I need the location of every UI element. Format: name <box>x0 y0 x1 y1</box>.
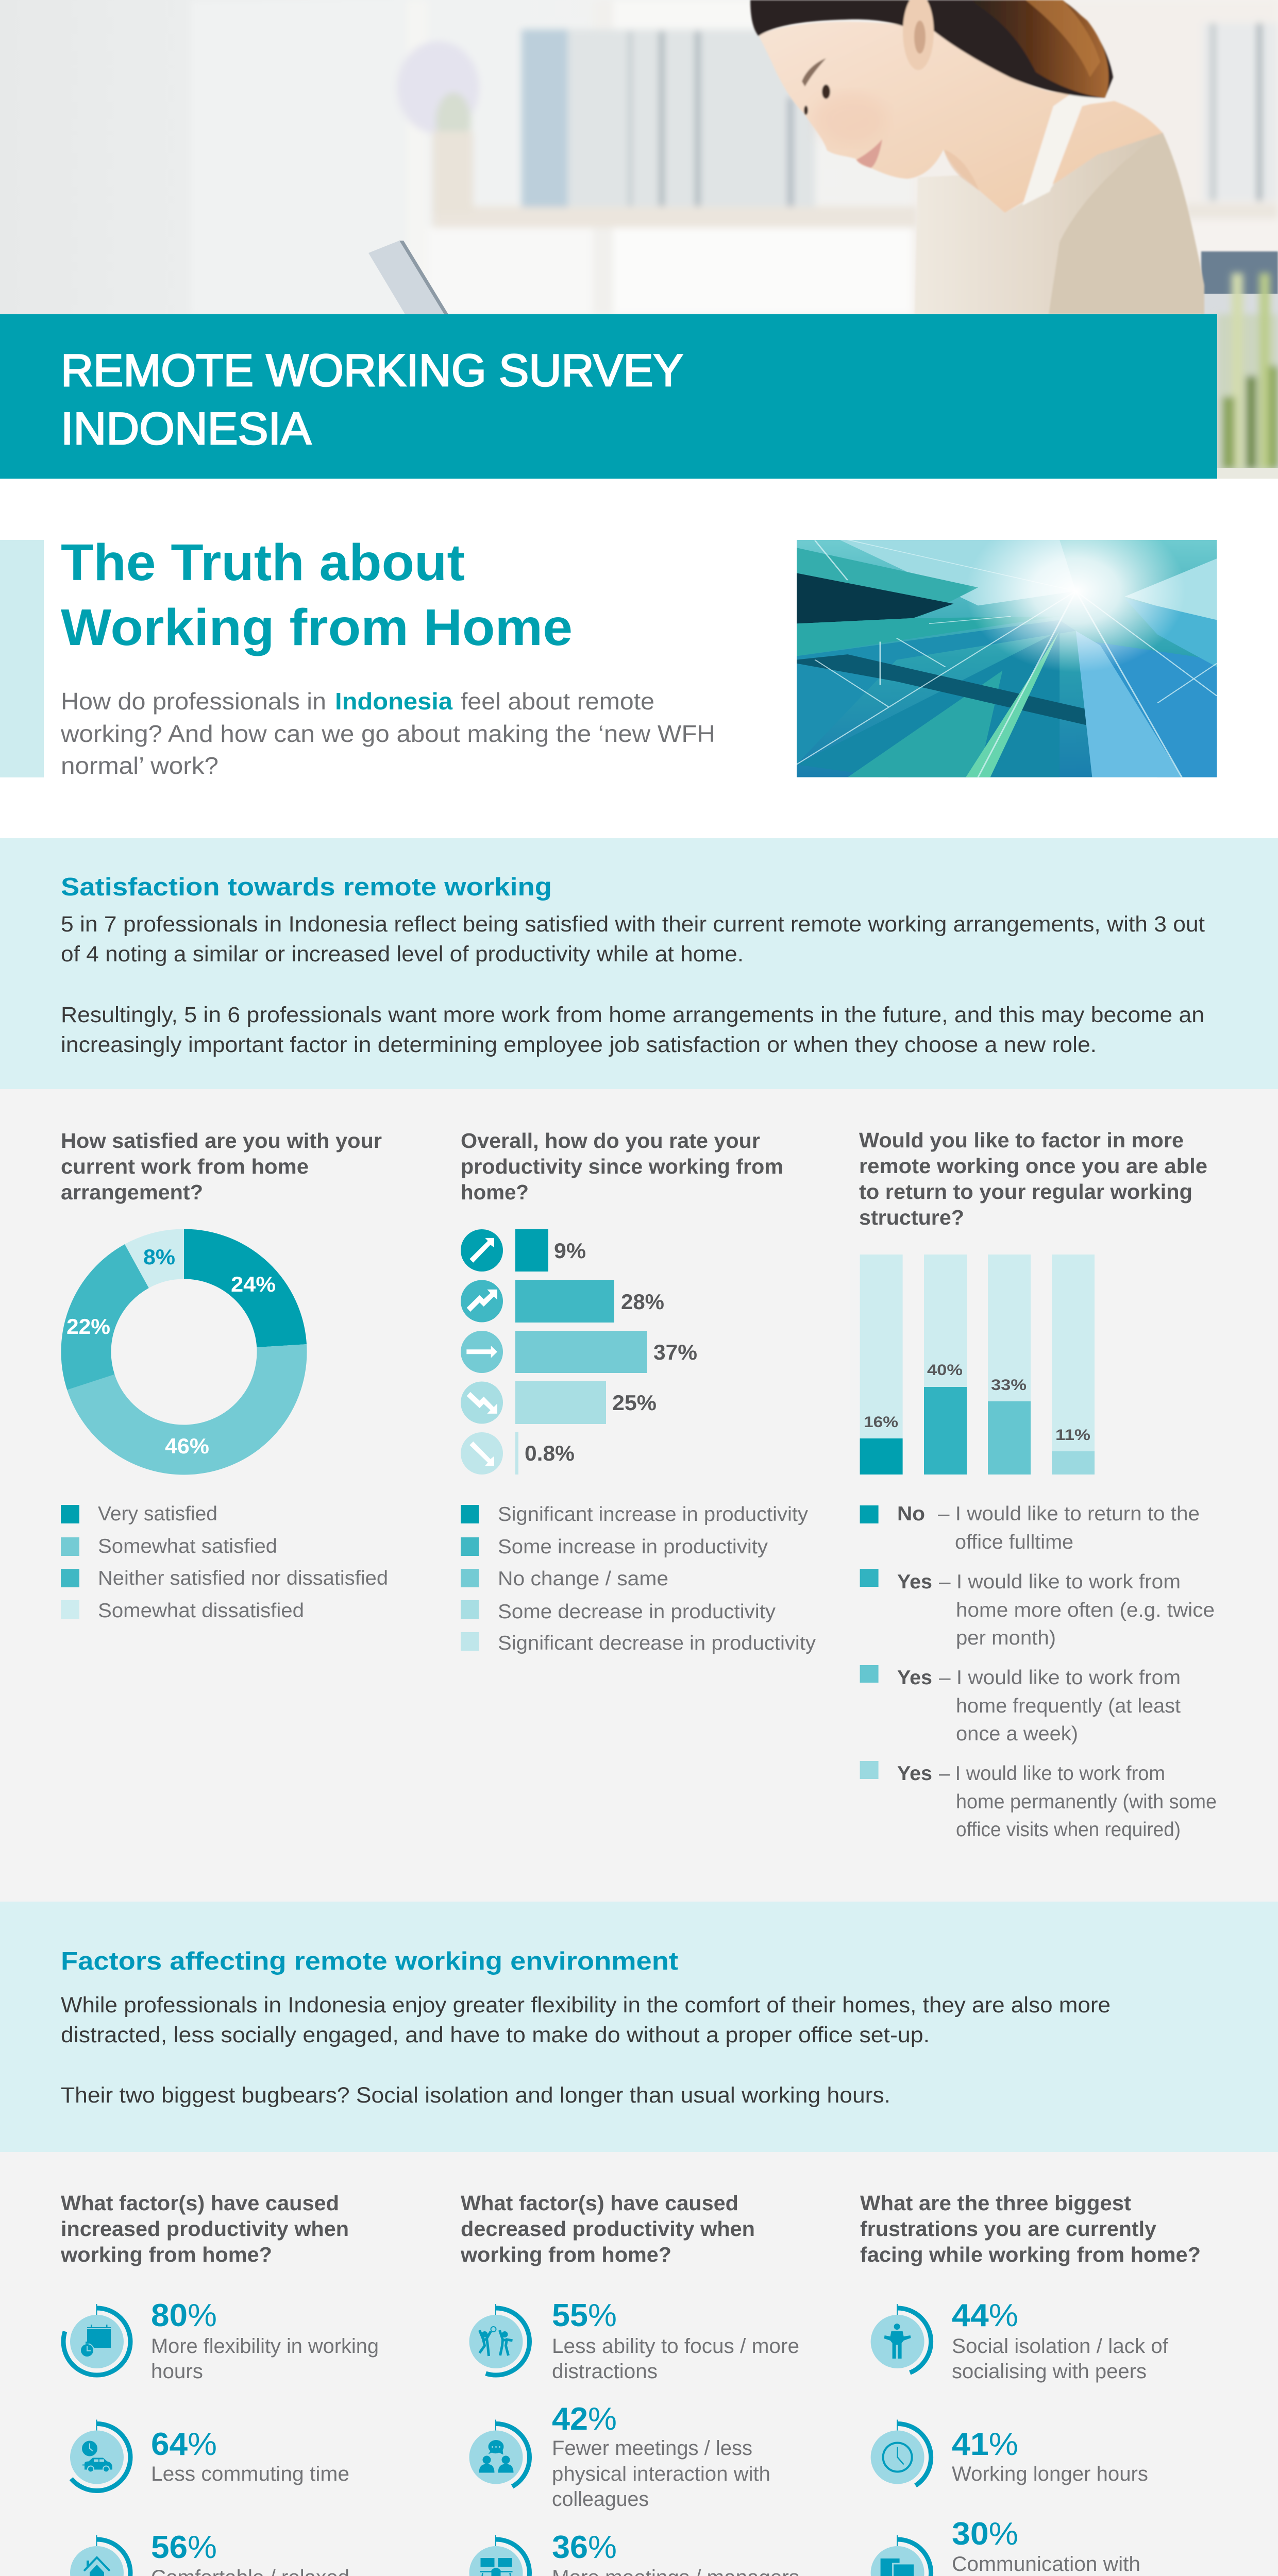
item: 55% distractions: distractions <box>552 2360 658 2383</box>
item: 80% flexibility <box>63 2298 379 2383</box>
icon: two people talking <box>463 2419 530 2490</box>
column legend: home more often (e.g. twice <box>956 1599 1215 1621</box>
icon: children playing <box>463 2304 530 2375</box>
section text <box>61 1993 1111 2108</box>
item: 64% commuting: Less commuting time <box>151 2463 349 2485</box>
question: Would you like to factor in more <box>859 1128 1184 1152</box>
donut chart: 24% <box>231 1272 276 1296</box>
main title: Working from Home <box>61 599 573 656</box>
column chart: 40% <box>927 1362 963 1379</box>
donut legend: Very satisfied <box>98 1503 217 1525</box>
item: 80% flexibility: hours <box>151 2360 203 2383</box>
item: 44% isolation: 44% <box>952 2298 1018 2333</box>
bar legend: Some increase in productivity <box>498 1536 768 1558</box>
column legend: Yes <box>897 1571 932 1593</box>
question: productivity since working from <box>461 1155 783 1178</box>
question <box>860 2191 1201 2266</box>
column legend: Yes <box>897 1762 932 1785</box>
column legend: – I would like to work from <box>939 1762 1165 1785</box>
main title <box>61 534 573 656</box>
question: arrangement? <box>61 1180 203 1204</box>
section text: increasingly important factor in determining employee job satisfaction or when they choose a new role. <box>61 1032 1097 1057</box>
question <box>61 1129 382 1204</box>
donut chart: 22% <box>66 1314 110 1338</box>
item: 30% communication <box>864 2516 1216 2576</box>
icon: office desks <box>463 2535 530 2576</box>
banner title: REMOTE WORKING SURVEY <box>61 345 683 396</box>
bar chart: 25% <box>612 1391 657 1415</box>
intro text: working? And how can we go about making the ‘new WFH <box>60 720 715 747</box>
banner: Remote Working Survey Indonesia <box>0 314 1217 479</box>
column legend: No <box>897 1503 925 1525</box>
bar chart <box>515 1229 697 1475</box>
section heading: Factors affecting remote working environment <box>61 1947 678 1975</box>
column: biggest frustrations <box>860 2191 1216 2576</box>
column chart: 11% <box>1055 1427 1090 1444</box>
item: 55% distractions: Less ability to focus / more <box>552 2335 799 2358</box>
question: Overall, how do you rate your <box>461 1129 760 1153</box>
donut legend: Neither satisfied nor dissatisfied <box>98 1567 388 1589</box>
column chart: 33% <box>991 1377 1027 1394</box>
item: 42% meetings <box>463 2401 770 2511</box>
column legend: once a week) <box>956 1723 1078 1745</box>
section heading: Satisfaction towards remote working <box>61 873 552 901</box>
item: 44% isolation: Social isolation / lack of <box>952 2335 1169 2358</box>
question: current work from home <box>61 1155 309 1178</box>
item: 56% comfort <box>63 2530 349 2576</box>
intro block <box>0 534 715 779</box>
item: 42% meetings: 42% <box>552 2401 617 2437</box>
bar legend: Significant increase in productivity <box>498 1503 808 1526</box>
question: structure? <box>859 1206 964 1229</box>
column legend <box>860 1503 1217 1841</box>
question: working from home? <box>460 2243 671 2266</box>
donut chart <box>51 1219 317 1485</box>
question <box>60 2191 349 2266</box>
column chart: 16% <box>864 1414 898 1431</box>
bar legend: Significant decrease in productivity <box>498 1632 816 1654</box>
section text: Their two biggest bugbears? Social isolation and longer than usual working hours. <box>61 2083 890 2108</box>
banner title: INDONESIA <box>61 403 311 454</box>
column legend: home permanently (with some <box>956 1791 1217 1813</box>
column legend: – I would like to work from <box>939 1571 1181 1593</box>
question: What are the three biggest <box>860 2191 1131 2215</box>
item: 64% commuting <box>63 2419 349 2490</box>
column: decreased productivity factors <box>460 2191 799 2576</box>
icon: lone person <box>864 2304 931 2375</box>
panel: factors affecting remote working environment <box>0 1902 1278 2152</box>
question <box>460 2191 755 2266</box>
column: increased productivity factors <box>60 2191 379 2576</box>
chair and plant <box>1170 251 1278 479</box>
item: 55% distractions <box>463 2298 799 2383</box>
photo: glass building <box>797 540 1217 777</box>
item: 80% flexibility: 80% <box>151 2298 217 2333</box>
bar legend <box>461 1503 816 1654</box>
item: 36% check-ins <box>463 2530 799 2576</box>
icon: speech bubbles <box>864 2535 931 2576</box>
item: 80% flexibility: More flexibility in working <box>151 2335 379 2358</box>
chart panel: productivity bars <box>461 1129 816 1654</box>
column legend: – I would like to return to the <box>938 1503 1200 1525</box>
banner title <box>61 345 683 454</box>
column legend: office fulltime <box>955 1531 1073 1553</box>
icon: clock <box>864 2419 931 2490</box>
item: 44% isolation: socialising with peers <box>952 2360 1147 2383</box>
question <box>859 1128 1207 1229</box>
question: facing while working from home? <box>860 2243 1201 2266</box>
intro text <box>60 688 715 779</box>
item: 42% meetings: Fewer meetings / less <box>552 2437 752 2460</box>
section text: 5 in 7 professionals in Indonesia reflect being satisfied with their current remote working arrangements, with 3 out <box>61 912 1205 937</box>
question: to return to your regular working <box>859 1180 1192 1204</box>
question: increased productivity when <box>61 2217 349 2241</box>
bar chart: 37% <box>653 1340 697 1364</box>
intro text: feel about remote <box>461 688 654 715</box>
laptop screen <box>368 241 448 314</box>
bar chart: 9% <box>554 1239 586 1263</box>
icon: calendar and clock <box>63 2304 130 2375</box>
bar legend: No change / same <box>498 1568 668 1590</box>
intro text: Indonesia <box>335 688 452 715</box>
column legend: office visits when required) <box>956 1819 1181 1841</box>
donut legend: Somewhat satisfied <box>98 1535 277 1557</box>
item: 41% longer hours: 41% <box>952 2427 1018 2462</box>
section text: distracted, less socially engaged, and have to make do without a proper office set-up. <box>61 2023 930 2047</box>
item: 55% distractions: 55% <box>552 2298 617 2333</box>
item: 41% longer hours: Working longer hours <box>952 2463 1148 2485</box>
item: 30% communication: 30% <box>952 2516 1018 2552</box>
donut legend <box>61 1503 388 1622</box>
question: How satisfied are you with your <box>61 1129 382 1153</box>
section text <box>61 912 1205 1057</box>
section text: While professionals in Indonesia enjoy greater flexibility in the comfort of their homes, they are also more <box>61 1993 1111 2018</box>
column legend: per month) <box>956 1627 1056 1649</box>
donut chart: 46% <box>165 1434 209 1458</box>
question: What factor(s) have caused <box>61 2191 339 2215</box>
item: 36% check-ins: 36% <box>552 2530 617 2565</box>
question: remote working once you are able <box>859 1154 1207 1178</box>
bar legend: Some decrease in productivity <box>498 1601 776 1623</box>
column legend: Yes <box>897 1667 932 1689</box>
question: frustrations you are currently <box>860 2217 1156 2241</box>
item: 44% isolation <box>864 2298 1169 2383</box>
icon: car and clock <box>63 2419 130 2490</box>
woman <box>750 0 1204 314</box>
intro text: normal’ work? <box>61 752 218 779</box>
section text: of 4 noting a similar or increased level of productivity while at home. <box>61 942 744 967</box>
item: 41% longer hours <box>864 2419 1148 2490</box>
donut legend: Somewhat dissatisfied <box>98 1600 304 1622</box>
item: 64% commuting: 64% <box>151 2427 217 2462</box>
item: 42% meetings: colleagues <box>552 2488 649 2511</box>
item: 30% communication: Communication with <box>952 2553 1140 2575</box>
hero photo: woman working at laptop <box>0 0 1278 479</box>
intro text: How do professionals in <box>61 688 326 715</box>
panel: satisfaction towards remote working <box>0 838 1278 1089</box>
question: home? <box>461 1180 529 1204</box>
item: 42% meetings: physical interaction with <box>552 2463 770 2485</box>
column legend: home frequently (at least <box>956 1695 1181 1717</box>
question: decreased productivity when <box>461 2217 755 2241</box>
question: working from home? <box>60 2243 272 2266</box>
question <box>461 1129 783 1204</box>
section text: Resultingly, 5 in 6 professionals want more work from home arrangements in the future, and this may become an <box>61 1003 1204 1027</box>
question: What factor(s) have caused <box>461 2191 738 2215</box>
bar chart: 0.8% <box>525 1441 575 1465</box>
column chart <box>860 1255 1095 1475</box>
main title: The Truth about <box>61 534 465 591</box>
item: 56% comfort: 56% <box>151 2530 217 2565</box>
bar chart: 28% <box>621 1290 664 1314</box>
icon: arrows in circles <box>461 1229 503 1475</box>
icon: house in hand <box>63 2535 130 2576</box>
chart panel: satisfaction donut <box>51 1129 388 1622</box>
column legend: – I would like to work from <box>939 1667 1181 1689</box>
chart panel: future remote working columns <box>859 1128 1217 1841</box>
donut chart: 8% <box>143 1245 175 1269</box>
